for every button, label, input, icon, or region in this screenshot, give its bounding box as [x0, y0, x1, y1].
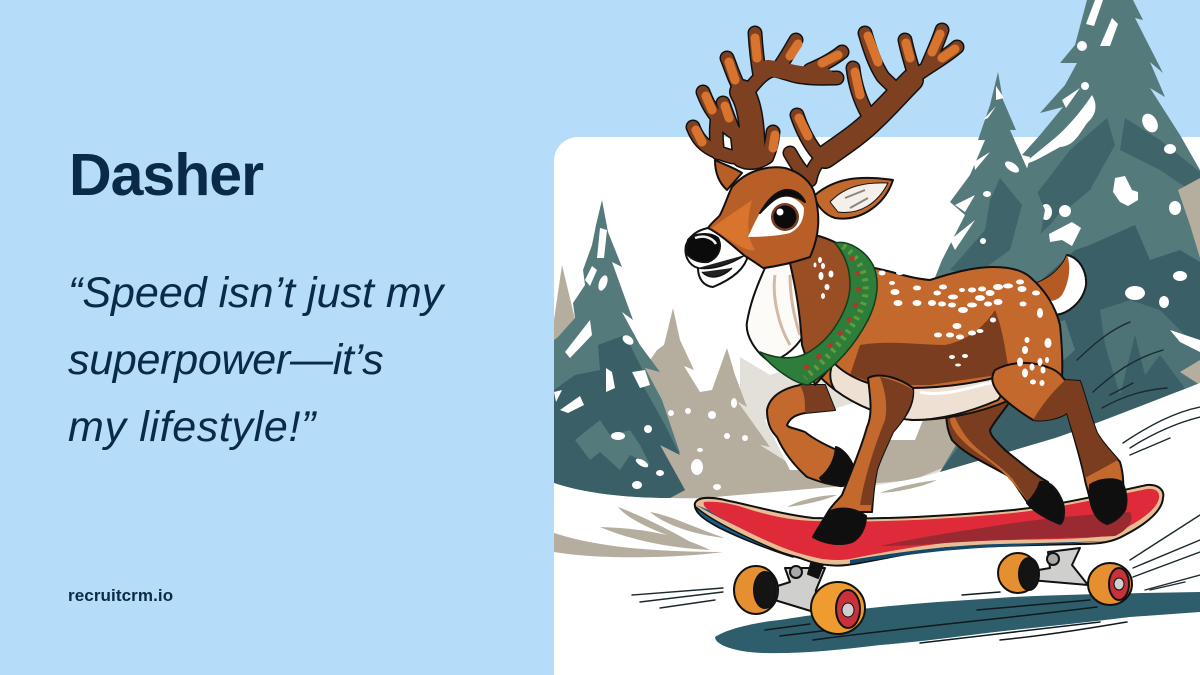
quote: superpower—it’s	[68, 336, 383, 384]
spots	[878, 270, 1052, 386]
quote	[68, 269, 446, 451]
left ear	[715, 160, 742, 190]
motion lines	[632, 322, 1200, 608]
left antler	[693, 33, 842, 163]
quote: my lifestyle!”	[68, 403, 316, 451]
shadow streaks	[765, 592, 1127, 643]
distant beige trees	[554, 265, 965, 500]
deck underside	[696, 507, 793, 557]
skateboard	[695, 485, 1163, 634]
near hind leg	[992, 363, 1126, 524]
head highlight	[712, 200, 755, 250]
website label: recruitcrm.io	[68, 586, 173, 605]
nose	[686, 234, 720, 262]
far hind leg	[946, 398, 1064, 524]
snow drift strokes	[554, 480, 937, 557]
body	[809, 266, 1062, 420]
quote: “Speed isn’t just my	[68, 269, 443, 317]
snow hill	[554, 383, 1200, 675]
deck top	[704, 489, 1159, 560]
right ear	[815, 178, 893, 219]
white chest	[747, 262, 809, 362]
white belly	[830, 362, 1010, 420]
right antler	[790, 30, 957, 180]
muzzle	[686, 228, 748, 287]
wreath	[760, 242, 877, 385]
far front leg	[767, 385, 854, 486]
large pine tree top right	[940, 0, 1200, 472]
mouth	[698, 255, 745, 277]
pine tree left	[554, 200, 685, 498]
body shading	[850, 310, 1010, 385]
ground shadow	[715, 592, 1200, 653]
panel: snowy scene background	[554, 137, 1200, 675]
deck	[695, 485, 1163, 566]
near front leg	[813, 376, 913, 544]
head	[708, 167, 818, 268]
tail	[1037, 255, 1086, 315]
eye	[748, 190, 805, 237]
medium pine tree behind deer	[930, 72, 1045, 290]
wheels and trucks	[734, 548, 1132, 634]
title: Dasher	[69, 142, 263, 208]
illustration scene	[554, 0, 1200, 675]
deer	[686, 30, 1126, 544]
neck spots	[814, 257, 834, 299]
neck	[790, 235, 862, 385]
